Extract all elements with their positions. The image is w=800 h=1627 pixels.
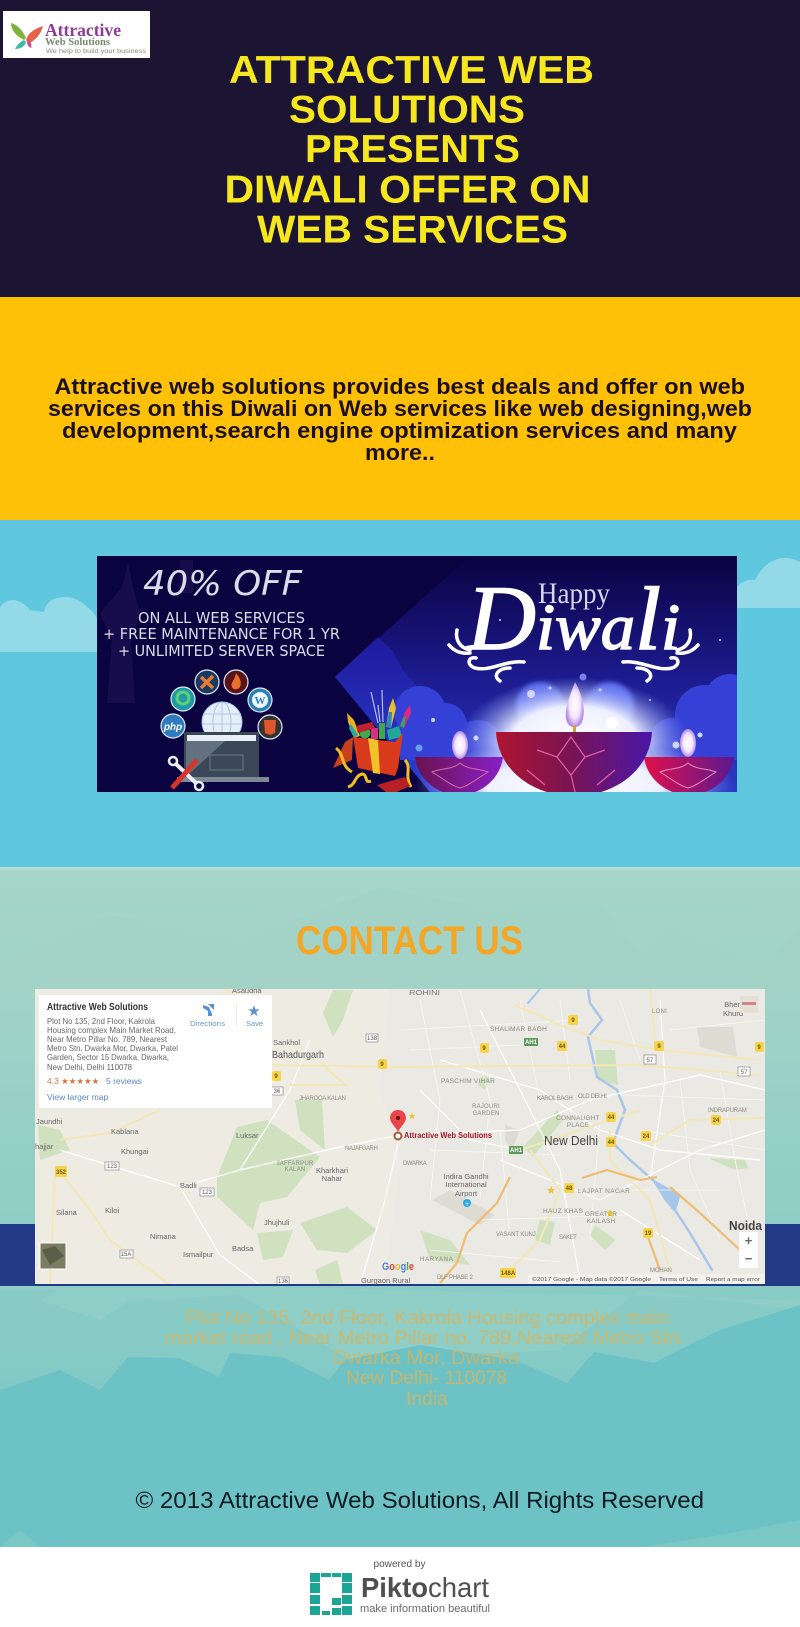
map info card: Save <box>246 1019 263 1028</box>
text block: description: more.. <box>365 440 435 465</box>
place labels: PLACE <box>567 1122 590 1129</box>
contents <box>360 730 370 738</box>
road shields: 9 <box>482 1046 486 1052</box>
icon: codeigniter <box>224 670 248 694</box>
place labels: LAJPAT NAGAR <box>578 1188 630 1195</box>
navy band <box>0 1224 800 1286</box>
google logo: Google <box>382 1261 414 1273</box>
firecrackers <box>377 777 410 792</box>
place labels: hajjar <box>35 1142 54 1151</box>
footer: powered by Piktochart: make information beautiful <box>360 1603 490 1615</box>
road shields: 9 <box>657 1044 661 1050</box>
top-right map thumbnail <box>740 996 758 1013</box>
card address: Plot No 135, 2nd Floor, Kakrola <box>47 1016 155 1026</box>
wordmark: Piktochart <box>361 1572 489 1603</box>
title: SOLUTIONS <box>289 88 525 132</box>
road shields: 57 <box>741 1070 748 1076</box>
road shields: AH1 <box>510 1148 523 1154</box>
place labels: Nahar <box>322 1174 343 1183</box>
place labels: HAUZ KHAS <box>543 1208 583 1215</box>
place labels: SAKET <box>559 1235 577 1241</box>
road shields: 15A <box>121 1252 131 1258</box>
satellite thumbnail <box>40 1243 66 1269</box>
place labels: KAROL BAGH <box>537 1096 573 1102</box>
card address: Housing complex Main Market Road, <box>47 1025 176 1035</box>
place labels: Ismailpur <box>183 1250 214 1259</box>
text block: description: development,search engine optimization services and many <box>62 418 738 443</box>
place labels: Bhen <box>724 1000 742 1009</box>
promotional text: ON ALL WEB SERVICES <box>138 609 305 627</box>
logo <box>3 11 150 58</box>
promotional text: + UNLIMITED SERVER SPACE <box>118 642 325 660</box>
title: WEB SERVICES <box>257 208 568 252</box>
central glow <box>418 679 728 792</box>
road shields: 9 <box>757 1045 761 1051</box>
icon: wordpress: W <box>254 695 266 707</box>
road shields: 57 <box>647 1058 654 1064</box>
road shields: 44 <box>559 1044 566 1050</box>
place labels: Asaudha <box>232 986 262 995</box>
white roads <box>60 1000 765 1285</box>
road shields: 9 <box>274 1074 278 1080</box>
place labels: Luksar <box>236 1131 259 1140</box>
flourish right <box>623 630 698 681</box>
web technology icons <box>161 670 282 739</box>
place labels: JAFFARPUR <box>277 1161 314 1167</box>
footer: powered by Piktochart: powered by <box>374 1558 426 1570</box>
zoom controls: − <box>745 1251 753 1266</box>
road shields: 352 <box>56 1170 67 1176</box>
text: copyright: © 2013 Attractive Web Solutions, All Rights Reserved <box>136 1487 704 1513</box>
place labels: International <box>445 1180 487 1189</box>
cloud right <box>730 558 800 608</box>
text block: description: Attractive web solutions provides best deals and offer on web <box>54 374 745 399</box>
road shields: 123 <box>202 1190 213 1196</box>
map attribution: Terms of Use <box>659 1277 698 1283</box>
icon: butterfly <box>11 23 43 49</box>
sparkles <box>416 619 721 752</box>
place labels: Airport <box>455 1189 478 1198</box>
map: Google map location <box>35 986 765 1286</box>
card address: Garden, Sector 15 Dwarka, Dwarka, <box>47 1052 169 1062</box>
road shields: 19 <box>645 1231 652 1237</box>
place labels: RAJOURI <box>472 1104 500 1110</box>
text block: description <box>48 374 752 465</box>
place labels: PASCHIM VIHAR <box>441 1078 495 1085</box>
road shields: AH1 <box>525 1040 538 1046</box>
card address: Metro Stn. Dwarka Mor, Dwarka, Patel <box>47 1043 178 1053</box>
card address: Near Metro Pillar No. 789, Nearest <box>47 1034 168 1044</box>
text block: address: market road , Near Metro Pillar no. 789,Nearest Metro Stn. <box>165 1328 685 1349</box>
text block: address: New Delhi- 110078 <box>346 1368 507 1389</box>
place labels: NAJAFGARH <box>345 1146 378 1152</box>
icon: save star: ★ <box>247 1003 261 1020</box>
place labels: SHALIMAR BAGH <box>490 1026 547 1033</box>
place labels: LONI <box>652 1009 667 1015</box>
place labels: OLD DELHI <box>578 1094 607 1100</box>
icon: Piktochart mark <box>310 1573 352 1615</box>
icon: php: php <box>163 722 182 733</box>
urban area <box>380 989 765 1285</box>
map markers: ★ <box>546 1185 556 1197</box>
road shields: 9 <box>380 1062 384 1068</box>
road shields: 44 <box>608 1140 615 1146</box>
place labels: Noida <box>729 1219 763 1233</box>
icon: html5 <box>258 715 282 739</box>
streamers <box>336 748 411 787</box>
place labels: GARDEN <box>473 1111 499 1117</box>
logo: Attractive <box>45 20 121 40</box>
place labels: Kiloi <box>105 1206 120 1215</box>
place labels: Indira Gandhi <box>443 1172 489 1181</box>
flourish left <box>449 630 524 681</box>
map attribution <box>528 1274 765 1284</box>
icon: map pin and label <box>390 1110 493 1140</box>
blue diamond shape <box>335 637 430 792</box>
icon: open source <box>171 687 195 711</box>
lower mountain <box>0 1305 800 1547</box>
road shields: 36 <box>274 1089 281 1095</box>
banner image: Diwali offer <box>97 556 737 792</box>
place labels: Sankhol <box>273 1038 300 1047</box>
map info card: 4.3 ★★★★★ <box>47 1076 100 1086</box>
box <box>353 733 403 776</box>
panel: banner section background <box>0 520 800 867</box>
promotional text: 40% OFF <box>143 564 302 604</box>
cloud left <box>0 597 100 652</box>
map info card: Directions <box>190 1019 225 1028</box>
place labels: Jaundhi <box>36 1117 63 1126</box>
lantern silhouettes <box>100 560 193 703</box>
place labels: Khurd <box>723 1009 743 1018</box>
map attribution: Report a map error <box>706 1277 760 1283</box>
map info card: 5 reviews <box>106 1076 142 1086</box>
street mesh <box>400 990 765 1262</box>
title <box>224 49 594 252</box>
place labels: KAILASH <box>587 1218 616 1225</box>
map markers: ★ <box>605 1208 615 1220</box>
icon: map pin and label: Attractive Web Solutions <box>404 1131 493 1140</box>
banner left dark panel <box>97 556 470 792</box>
place labels: Khungai <box>121 1147 149 1156</box>
zoom controls <box>739 1232 758 1268</box>
icon: gift with fireworks <box>333 690 411 795</box>
title: DIWALI OFFER ON <box>224 168 590 212</box>
icon: laptop with tools <box>169 732 269 790</box>
card address <box>47 1016 178 1072</box>
place labels: Nimana <box>150 1232 177 1241</box>
card address: New Delhi, Delhi 110078 <box>47 1062 132 1072</box>
place labels: DLF PHASE 2 <box>437 1275 473 1281</box>
yellow roads <box>50 989 765 1285</box>
place labels <box>35 986 763 1285</box>
footer: powered by Piktochart <box>0 1547 800 1627</box>
road shields: 48 <box>566 1186 573 1192</box>
rockets <box>347 713 360 738</box>
panel: contact section background <box>0 867 800 1547</box>
blue clouds <box>394 674 737 760</box>
road shields: 9 <box>571 1018 575 1024</box>
text block: address: India <box>406 1389 448 1410</box>
panel: offer description <box>0 297 800 520</box>
text block: description: services on this Diwali on Web services like web designing,web <box>48 396 752 421</box>
right small lamp <box>644 729 734 795</box>
place labels: GREATER <box>585 1211 617 1218</box>
road shields: 24 <box>713 1118 720 1124</box>
center large lamp <box>496 682 652 796</box>
place labels: Kharkhari <box>316 1166 348 1175</box>
place labels: CONNAUGHT <box>556 1115 600 1122</box>
icon: directions <box>203 1004 214 1016</box>
text block: address: Plot No 135, 2nd Floor, Kakrola Housing complex main <box>185 1308 669 1329</box>
text block: address <box>165 1308 685 1410</box>
place labels: New Delhi <box>544 1133 598 1148</box>
icon: map pin and label: ★ <box>408 1111 416 1121</box>
icon: globe <box>202 702 242 732</box>
road shields: 148A <box>501 1271 516 1277</box>
promotional text <box>104 570 340 656</box>
green areas <box>38 990 748 1285</box>
place labels: Silana <box>56 1208 78 1217</box>
road shields: 123 <box>107 1164 118 1170</box>
place labels: Kablana <box>111 1127 139 1136</box>
place labels: INDRAPURAM <box>708 1108 747 1114</box>
icon: joomla <box>195 670 219 694</box>
orange highways <box>440 1170 740 1283</box>
map info card: View larger map <box>47 1092 109 1102</box>
road shields: 136 <box>278 1279 289 1285</box>
Happy Diwali lettering <box>447 584 700 683</box>
place labels: HARYANA <box>420 1257 453 1263</box>
map info card <box>39 995 272 1108</box>
place labels: KALAN <box>285 1167 305 1173</box>
title: PRESENTS <box>305 128 520 171</box>
map info card: Attractive Web Solutions <box>47 1002 148 1013</box>
left small lamp <box>415 731 503 795</box>
place labels: Bahadurgarh <box>272 1049 324 1061</box>
sticks <box>371 690 383 723</box>
road shields <box>55 1015 764 1285</box>
title: ATTRACTIVE WEB <box>229 49 594 92</box>
place labels: Badsa <box>232 1244 254 1253</box>
rivers <box>528 989 712 1270</box>
map attribution: ©2017 Google - Map data ©2017 Google <box>532 1276 651 1283</box>
place labels: JHAROOA KALAN <box>299 1096 346 1102</box>
road shields: 138 <box>367 1036 378 1042</box>
lamps <box>415 682 734 796</box>
panel: header <box>0 0 800 297</box>
place labels: MOHAN <box>650 1268 672 1274</box>
map markers: + <box>465 1201 469 1208</box>
place labels: VASANT KUNJ <box>496 1232 536 1238</box>
heading: contact us: CONTACT US <box>296 919 523 963</box>
road shields: 24 <box>643 1134 650 1140</box>
place labels: Gurgaon Rural <box>361 1276 411 1285</box>
place labels: Badli <box>180 1181 197 1190</box>
map markers <box>463 1185 615 1220</box>
place labels: Jhujhuli <box>264 1218 290 1227</box>
logo: Web Solutions <box>45 37 110 48</box>
zoom controls: + <box>745 1233 753 1248</box>
promotional text: + FREE MAINTENANCE FOR 1 YR <box>103 625 340 643</box>
logo: We help to build your business <box>46 48 147 55</box>
place labels: ROHINI <box>409 990 440 997</box>
road shields: 44 <box>608 1115 615 1121</box>
Happy Diwali lettering: Happy <box>538 577 610 610</box>
Happy Diwali lettering: Diwali <box>465 567 680 669</box>
place labels: DWARKA <box>403 1161 427 1167</box>
grey lands <box>432 1027 737 1225</box>
text block: address: Dwarka Mor, Dwarka <box>333 1348 519 1369</box>
